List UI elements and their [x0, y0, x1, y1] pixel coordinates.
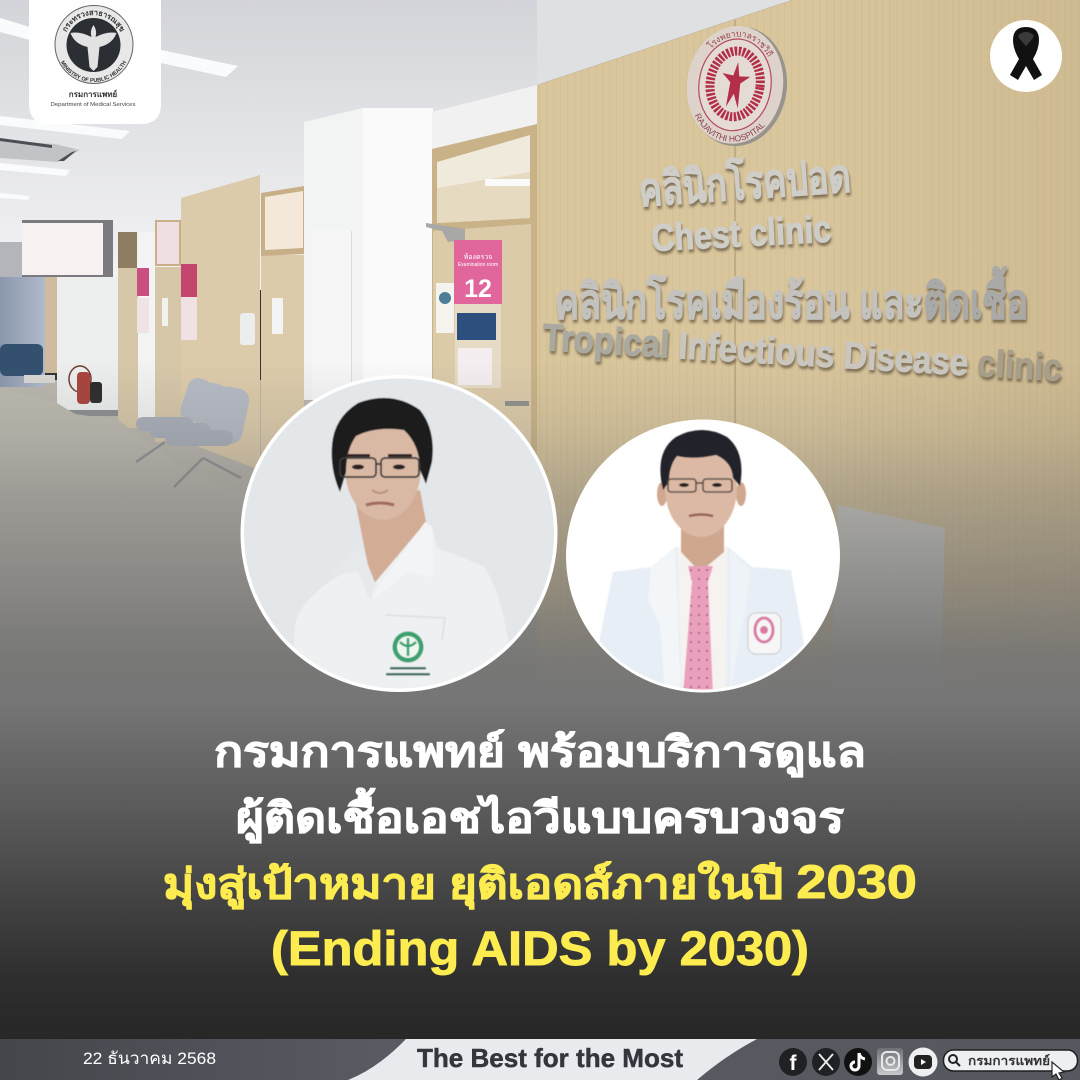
cursor icon: [1052, 1062, 1064, 1080]
headline: [163, 729, 917, 976]
department name english: Department of Medical Services: [50, 102, 136, 108]
pocket line: [385, 615, 445, 640]
tv screen: [22, 220, 113, 277]
logo card: [29, 0, 161, 124]
white panel between doors: [138, 232, 155, 418]
floor base: [0, 380, 1080, 720]
hospital emblem: [686, 26, 788, 146]
neck: [681, 525, 724, 572]
facebook icon: f: [790, 1052, 798, 1075]
sign line 2: Chest clinic: [650, 209, 832, 260]
background clinic photo: [0, 0, 1080, 720]
wall signage: [541, 148, 1063, 390]
headline line 2: ผู้ติดเชื้อเอชไอวีแบบครบวงจร: [236, 788, 844, 844]
ribbon icon: [1010, 27, 1042, 80]
face: [345, 416, 421, 520]
black ribbon badge: [990, 20, 1062, 92]
glasses: [340, 458, 419, 477]
door 14 sign: [181, 264, 197, 340]
room 12 sign: ห้องตรวจ: [464, 253, 492, 261]
slogan ribbon: [348, 1039, 757, 1080]
white pillar: [304, 108, 433, 400]
eyes: [679, 483, 722, 487]
upper wall above door 12: [432, 85, 537, 150]
slogan ribbon: The Best for the Most: [417, 1043, 683, 1073]
ministry seal: MINISTRY OF PUBLIC HEALTH: [60, 60, 126, 82]
floor: [0, 388, 300, 720]
lapel: [648, 548, 680, 687]
shirt badge: [386, 632, 430, 676]
nose and mouth: [372, 490, 388, 493]
x icon: [812, 1048, 840, 1076]
wood feature wall: [537, 0, 1080, 700]
waiting seats far: [0, 344, 43, 376]
shirt: [677, 547, 728, 695]
fire extinguisher: [69, 366, 102, 404]
tie: [683, 566, 713, 695]
grey chairs: [136, 375, 251, 487]
pocket badge: [748, 613, 781, 654]
shirt: [294, 536, 508, 688]
search pill: [944, 1050, 1078, 1080]
room 12 sign: [454, 240, 502, 304]
facebook icon: [779, 1048, 807, 1076]
hair: [660, 430, 741, 490]
headline line 1: กรมการแพทย์ พร้อมบริการดูแล: [214, 729, 866, 778]
corridor white wall: [57, 277, 118, 413]
headline line 3: มุ่งสู่เป้าหมาย ยุติเอดส์ภายในปี 2030: [163, 855, 917, 910]
counter chair: [830, 505, 945, 700]
ceiling above wood wall: [537, 0, 792, 85]
ceiling lights: [0, 18, 238, 200]
date: 22 ธันวาคม 2568: [83, 1049, 216, 1068]
instagram icon: [877, 1048, 903, 1075]
search pill: กรมการแพทย์: [968, 1054, 1050, 1068]
hospital emblem: RAJAVITHI HOSPITAL: [694, 113, 766, 142]
door 13: [261, 186, 304, 485]
department name thai: กรมการแพทย์: [69, 89, 118, 99]
neck: [356, 490, 426, 586]
glasses: [668, 479, 732, 492]
wood wall section: [181, 175, 260, 470]
door 14: [155, 221, 181, 442]
room 12 sign: 12: [464, 275, 492, 303]
portrait right: [566, 420, 840, 695]
bottom dark gradient overlay: [0, 360, 1080, 1040]
sign line 4: Tropical Infectious Disease clinic: [541, 317, 1063, 390]
door closer: [426, 223, 465, 242]
headline line 4: (Ending AIDS by 2030): [271, 923, 809, 976]
youtube icon: [908, 1048, 938, 1076]
portrait left: [240, 375, 560, 695]
hand sanitizer: [240, 313, 255, 345]
ears and face: [657, 482, 667, 506]
far corridor: [0, 242, 22, 277]
ceiling: [0, 0, 540, 290]
left collar: [368, 565, 376, 586]
mouth: [689, 514, 713, 516]
right collar: [418, 522, 431, 532]
ministry seal: กระทรวงสาธารณสุข: [63, 10, 124, 32]
door 15: [118, 232, 138, 428]
hospital emblem: โรงพยาบาลราชวิถี: [706, 32, 774, 57]
door 15 sign: [137, 268, 149, 333]
air conditioner: [0, 138, 80, 162]
coat: [598, 547, 808, 695]
notice board: [455, 303, 501, 388]
brows and eyes: [346, 454, 412, 470]
hair: [332, 398, 433, 492]
tiktok icon: [844, 1048, 872, 1076]
door 12: [426, 124, 537, 480]
sign line 1: คลินิกโรคปอด: [637, 148, 852, 216]
room 12 sign: Examination room: [458, 262, 498, 268]
ministry seal: [54, 5, 134, 84]
sign line 3: คลินิกโรคเมืองร้อน และติดเชื้อ: [555, 266, 1028, 329]
footer bar: [0, 1039, 1080, 1080]
